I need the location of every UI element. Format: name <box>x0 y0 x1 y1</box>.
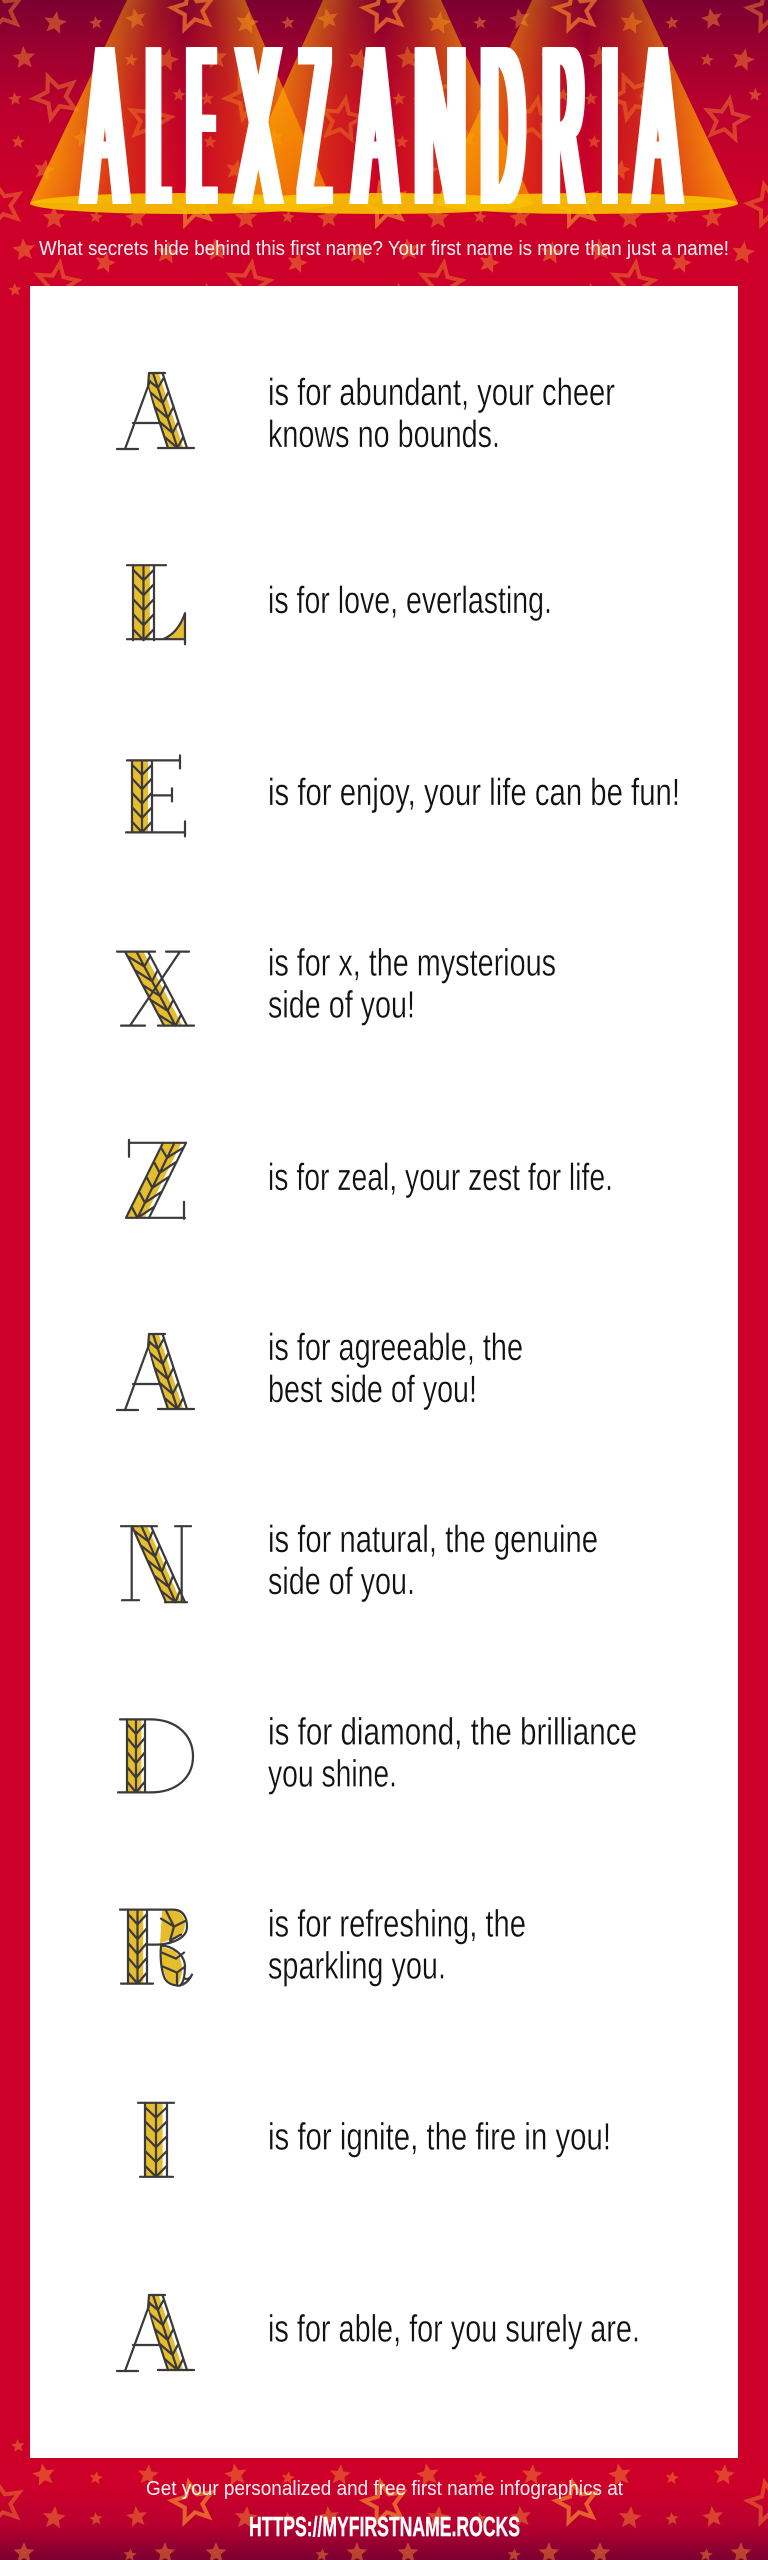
spotlight: middle cone <box>232 0 529 202</box>
row 5: text: is for zeal, your zest for life. <box>268 1157 613 1199</box>
spotlight floor ellipses <box>30 193 738 214</box>
title: A <box>631 0 672 253</box>
row 6: text: best side of you! <box>268 1369 477 1411</box>
row 4: text: is for x, the mysterious <box>268 943 556 985</box>
row 1: letter A <box>117 373 194 449</box>
title: N <box>409 0 458 253</box>
row 10: text: is for ignite, the fire in you! <box>268 2116 611 2158</box>
content panel <box>30 286 738 2458</box>
spotlight: left cone <box>30 0 326 203</box>
row 2: letter L <box>127 565 185 644</box>
row 6: text <box>268 1327 523 1411</box>
row 9: letter R <box>120 1910 192 1986</box>
footer: url: HTTPS://MYFIRSTNAME.ROCKS <box>249 2511 520 2542</box>
row 7: letter N <box>121 1526 191 1602</box>
row 1: text: knows no bounds. <box>268 414 500 456</box>
row 11: letter A <box>117 2295 194 2371</box>
title: R <box>538 0 576 253</box>
row 5: letter Z <box>126 1140 186 1219</box>
row 3: letter E <box>126 755 185 836</box>
row 4: text: side of you! <box>268 985 415 1027</box>
subtitle: What secrets hide behind this first name? Your first name is more than just a name! <box>39 238 729 260</box>
title: D <box>476 0 517 253</box>
row 8: text: is for diamond, the brilliance <box>268 1711 637 1753</box>
row 9: text: sparkling you. <box>268 1946 446 1988</box>
star field: bottom <box>0 2438 768 2560</box>
row 6: letter A <box>117 1334 194 1410</box>
title: L <box>143 0 160 253</box>
title: A <box>78 0 119 253</box>
row 4: letter X <box>117 952 194 1026</box>
title: X <box>231 0 272 253</box>
row 2: text: is for love, everlasting. <box>268 580 552 622</box>
title: Z <box>295 0 322 253</box>
footer: call to action: Get your personalized and free first name infographics at <box>146 2478 623 2500</box>
row 6: text: is for agreeable, the <box>268 1327 523 1369</box>
title: I <box>599 0 608 253</box>
row 7: text: side of you. <box>268 1561 415 1603</box>
spotlight: right cone <box>437 0 738 203</box>
row 8: text <box>268 1711 637 1795</box>
title: A <box>349 0 389 253</box>
row 9: text <box>268 1904 526 1988</box>
row 11: text: is for able, for you surely are. <box>268 2308 640 2350</box>
row 7: text: is for natural, the genuine <box>268 1519 598 1561</box>
row 8: letter D <box>118 1719 193 1792</box>
row 7: text <box>268 1519 598 1603</box>
row 1: text: is for abundant, your cheer <box>268 372 615 414</box>
row 10: letter I <box>138 2103 174 2177</box>
title: E <box>183 0 207 253</box>
row 9: text: is for refreshing, the <box>268 1904 526 1946</box>
star field: top <box>0 0 768 304</box>
row 8: text: you shine. <box>268 1753 397 1795</box>
row 1: text <box>268 372 615 456</box>
title <box>78 0 684 253</box>
row 4: text <box>268 943 556 1027</box>
